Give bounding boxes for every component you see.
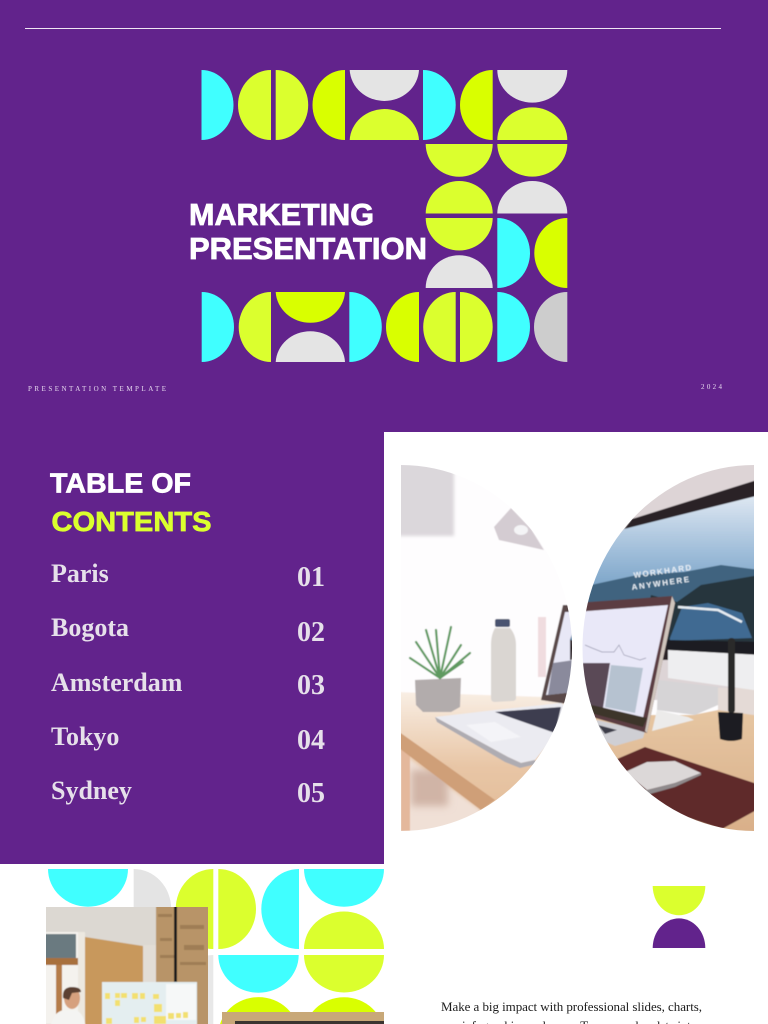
contents list: 05 — [297, 778, 325, 809]
panel: table of contents — [0, 432, 384, 864]
right half: monitor — [620, 465, 754, 700]
geometric pattern: lower left — [48, 869, 384, 1024]
contents list: Sydney — [51, 776, 132, 805]
photo: desk with laptop and monitor in two half circles: ANYWHERE — [631, 575, 690, 592]
top rule — [25, 28, 721, 29]
title: PRESENTATION — [189, 232, 427, 266]
photo: team at whiteboard — [46, 907, 208, 1024]
contents list: 03 — [297, 670, 325, 701]
footer label: presentation template: PRESENTATION TEMPLATE — [28, 385, 166, 393]
photo: desk detail, cropped at bottom — [222, 1012, 384, 1024]
title — [189, 198, 427, 266]
heading: contents: CONTENTS — [52, 506, 212, 537]
contents list: Amsterdam — [51, 668, 183, 697]
footer label: year: 2024 — [701, 383, 722, 391]
photo: desk with laptop and monitor in two half circles — [392, 458, 760, 840]
icon: lime and purple half circles — [653, 886, 705, 948]
contents list: Bogota — [51, 613, 129, 642]
text block: description — [441, 999, 702, 1024]
contents list: 01 — [297, 562, 325, 593]
left half: desk — [401, 692, 564, 811]
right half: mouse pad and mouse — [610, 747, 760, 829]
text block: description: Make a big impact with professional slides, charts, — [441, 999, 702, 1014]
right half: laptop — [590, 720, 645, 746]
contents list: Paris — [51, 559, 109, 588]
contents list: 04 — [297, 725, 325, 756]
contents list: 02 — [297, 617, 325, 648]
heading: table of: TABLE OF — [50, 468, 191, 498]
right half: pen holder — [728, 638, 735, 713]
title: MARKETING — [189, 198, 374, 232]
contents list — [51, 559, 325, 809]
contents list: Tokyo — [51, 722, 119, 751]
panel: cover background — [0, 0, 768, 432]
photo: desk with laptop and monitor in two half circles: WORKHARD — [633, 563, 692, 580]
geometric pattern: cover — [202, 70, 567, 362]
